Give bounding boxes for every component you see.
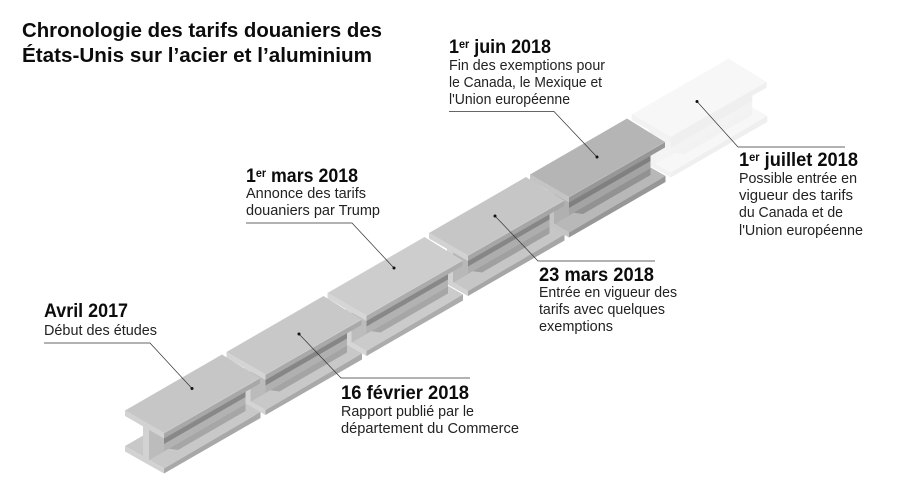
callout: 23 March 2018: 23 mars 2018 <box>539 265 654 286</box>
callout: 16 February 2018: Rapport publié par le <box>341 404 474 420</box>
callout: 1 July 2018: vigueur des tarifs <box>739 188 853 204</box>
callout: 1 June 2018: 1 <box>449 37 460 58</box>
callout: 1 June 2018: l'Union européenne <box>449 92 570 108</box>
callout: 1 June 2018: er <box>459 39 470 51</box>
callout: 1 July 2018: Possible entrée en <box>739 171 857 187</box>
callout: 16 February 2018: 16 février 2018 <box>341 383 469 404</box>
callout: April 2017: Avril 2017 <box>44 301 128 322</box>
callout: 16 February 2018 <box>298 332 519 437</box>
callout: 1 June 2018: juin 2018 <box>469 37 551 58</box>
title <box>22 19 382 67</box>
callout: 1 July 2018: juillet 2018 <box>760 150 858 171</box>
callout: 1 March 2018: douaniers par Trump <box>246 203 380 219</box>
segment: 1 March 2018 <box>328 237 463 356</box>
segment: 23 March 2018 <box>429 177 564 296</box>
callout: 1 July 2018: er <box>749 152 760 164</box>
steel beam made of six segments <box>125 58 767 474</box>
callout: April 2017: Début des études <box>44 323 157 339</box>
callout: 1 June 2018 <box>449 37 605 158</box>
callout: 23 March 2018: tarifs avec quelques <box>539 302 665 318</box>
callout: 1 March 2018: er <box>256 168 267 180</box>
segment: April 2017 <box>125 354 260 474</box>
callout: 1 June 2018: le Canada, le Mexique et <box>449 75 602 91</box>
segment: 16 February 2018 <box>226 296 362 415</box>
callout: 23 March 2018 <box>494 214 677 335</box>
callout: 1 March 2018: Annonce des tarifs <box>246 186 366 202</box>
title: États-Unis sur l’acier et l’aluminium <box>22 44 372 67</box>
segment: June 2018 <box>530 118 666 238</box>
callout: 16 February 2018: département du Commerce <box>341 421 519 437</box>
callout: 1 July 2018: 1 <box>739 150 750 171</box>
callout: 1 June 2018: Fin des exemptions pour <box>449 58 605 74</box>
segment: possible July 2018 tariffs <box>632 58 767 178</box>
callout: April 2017 <box>44 301 194 390</box>
callout: 1 July 2018 <box>696 100 863 239</box>
callout: 1 March 2018: 1 <box>246 166 257 187</box>
callout: 1 March 2018 <box>246 166 396 270</box>
callout: 1 July 2018: du Canada et de <box>739 205 843 221</box>
title: Chronologie des tarifs douaniers des <box>22 19 382 42</box>
callout: 1 March 2018: mars 2018 <box>266 166 358 187</box>
callout: 1 July 2018: l'Union européenne <box>739 223 863 239</box>
callout: 23 March 2018: Entrée en vigueur des <box>539 285 677 301</box>
callout: 23 March 2018: exemptions <box>539 319 613 335</box>
